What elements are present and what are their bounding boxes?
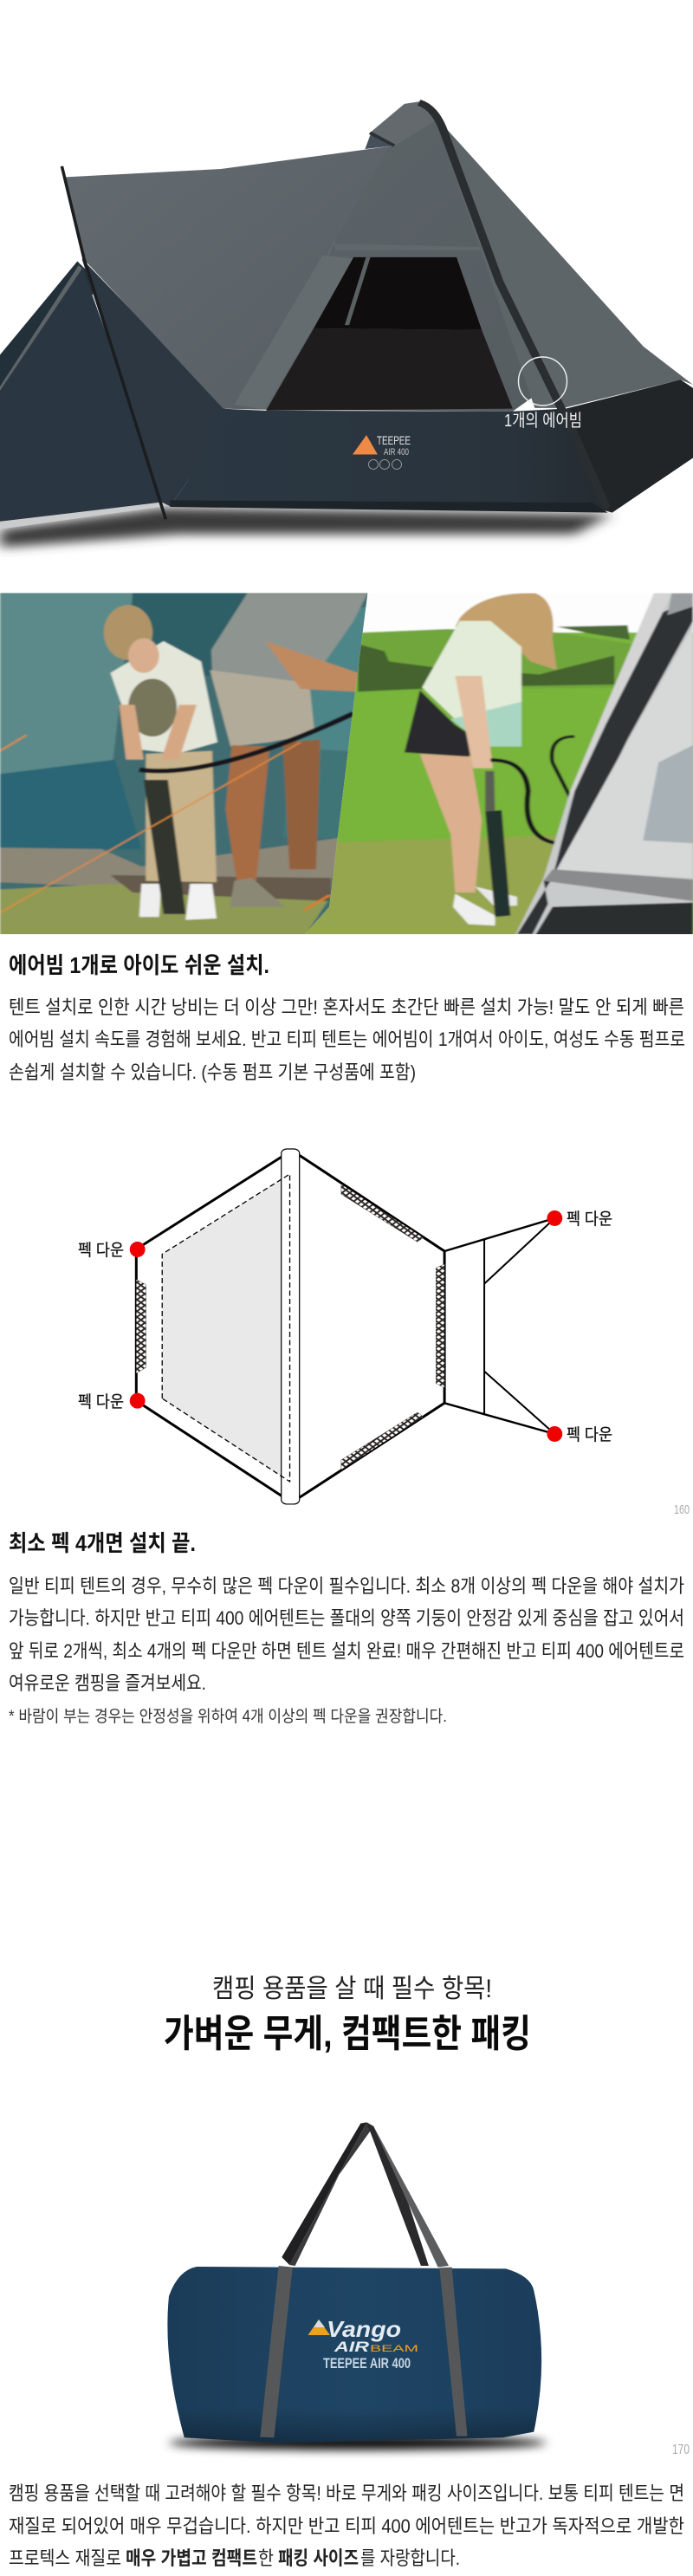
text block: weight and packing xyxy=(9,2482,684,2569)
gray inner tent area xyxy=(162,1174,290,1482)
air beam callout label: 1개의 에어빔 xyxy=(504,411,582,431)
left photo: boy using pump xyxy=(0,589,372,936)
text block: weight and packing: 패킹 사이즈 xyxy=(278,2547,359,2569)
bag logo: TEEPEE AIR 400 xyxy=(323,2355,411,2372)
bag logo xyxy=(308,2316,418,2372)
diagram: peg down plan xyxy=(78,1149,612,1504)
footnote: * 바람이 부는 경우는 안정성을 위하여 4개 이상의 펙 다운을 권장합니다. xyxy=(9,1707,447,1726)
tent ground shadow xyxy=(0,508,612,548)
man xyxy=(211,593,367,685)
text block: setup description: 손쉽게 설치할 수 있습니다. (수동 펌프 기본 구성품에 포함) xyxy=(9,1061,416,1083)
subheading: 캠핑 용품을 살 때 필수 항목! xyxy=(212,1975,492,2003)
heading: four pegs: 최소 펙 4개면 설치 끝. xyxy=(9,1530,196,1556)
peg labels: 펙 다운 xyxy=(567,1210,612,1229)
bag body xyxy=(167,2267,541,2443)
air beam callout circle xyxy=(518,357,567,406)
bag logo: Vango xyxy=(327,2316,401,2342)
text block: weight and packing: 프로텍스 재질로 xyxy=(9,2547,121,2569)
peg labels: 펙 다운 xyxy=(78,1241,124,1260)
boy xyxy=(111,641,217,754)
awning xyxy=(515,593,693,936)
tent logo xyxy=(353,433,411,470)
heading: easy setup: 에어빔 1개로 아이도 쉬운 설치. xyxy=(9,952,269,978)
peg labels: 펙 다운 xyxy=(567,1425,612,1444)
main title: 가벼운 무게, 컴팩트한 패킹 xyxy=(164,2013,531,2055)
peg labels xyxy=(78,1210,612,1444)
air beam pole xyxy=(419,102,606,508)
peg labels: 펙 다운 xyxy=(78,1392,124,1411)
photo: child and woman pumping the tent xyxy=(0,589,693,936)
vestibule lines xyxy=(444,1218,554,1434)
bag logo: AIR xyxy=(334,2339,370,2355)
bag logo: BEAM xyxy=(370,2344,418,2354)
text block: setup description xyxy=(9,996,685,1083)
photo: carry bag xyxy=(167,2122,547,2449)
tent logo: AIR 400 xyxy=(384,447,409,457)
text block: peg description xyxy=(9,1575,684,1694)
text block: peg description: 여유로운 캠핑을 즐겨보세요. xyxy=(9,1672,206,1694)
red peg points xyxy=(130,1210,562,1442)
central pole xyxy=(282,1149,300,1504)
text block: weight and packing: 매우 가볍고 컴팩트 xyxy=(126,2547,257,2569)
bag straps xyxy=(260,2266,293,2437)
tent door mesh xyxy=(266,257,513,411)
tent logo: TEEPEE xyxy=(377,433,411,447)
bag shadow xyxy=(169,2436,547,2449)
woman xyxy=(456,593,557,670)
right photo: woman using pump xyxy=(305,589,693,936)
mesh vents xyxy=(136,1184,444,1470)
bag handles xyxy=(282,2122,449,2268)
text block: weight and packing: 를 자랑합니다. xyxy=(360,2547,460,2569)
text block: weight and packing: 한 xyxy=(258,2547,274,2569)
hose and guy ropes xyxy=(139,713,353,771)
photo: inflated Teepee tent xyxy=(0,101,693,548)
